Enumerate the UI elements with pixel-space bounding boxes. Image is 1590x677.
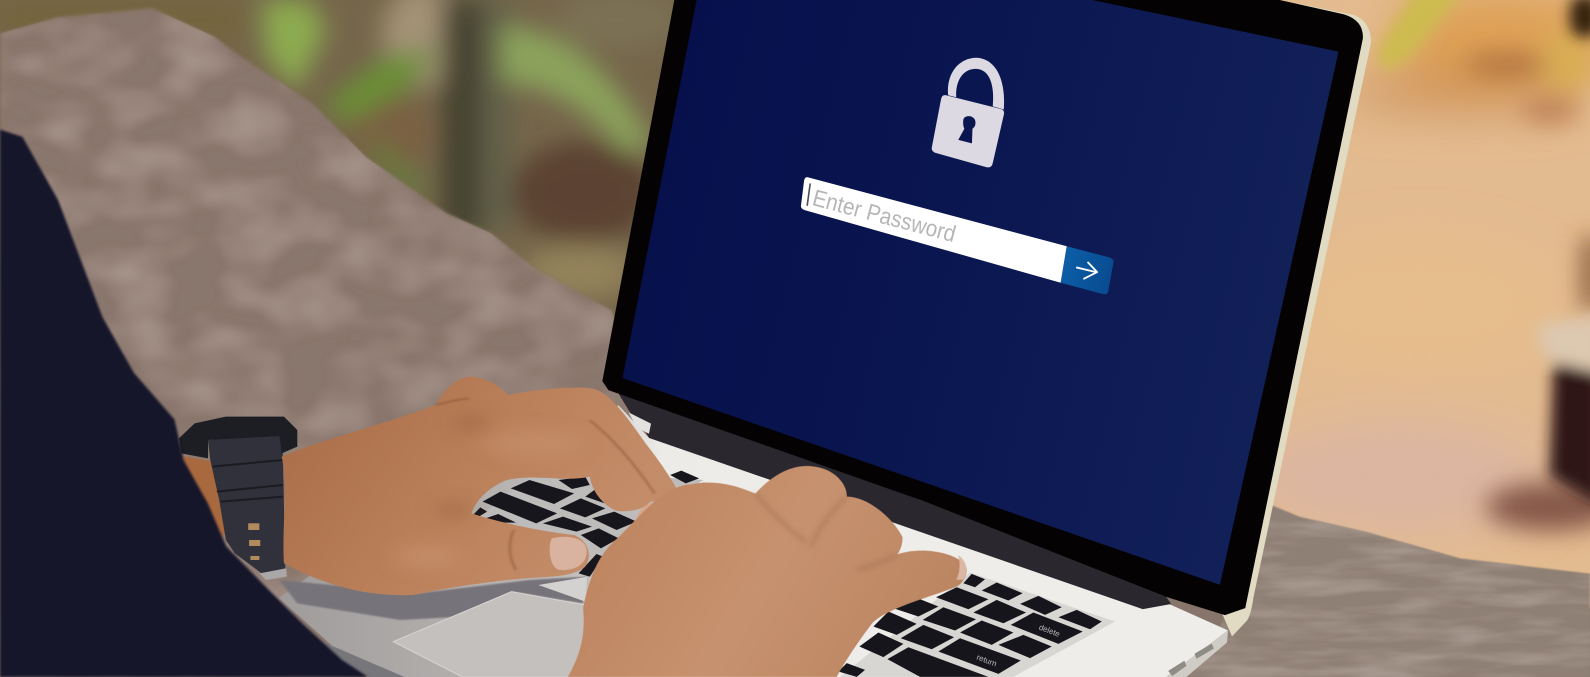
dark shirt sleeve xyxy=(0,130,368,677)
keyboard section between the hands xyxy=(471,471,713,577)
background: blurred foliage behind the table xyxy=(0,0,791,345)
lid black bezel xyxy=(602,0,1363,615)
laptop deck xyxy=(279,405,1228,677)
keyboard right section: delete xyxy=(1038,623,1062,639)
laptop xyxy=(279,0,1371,677)
trackpad and hand shadow xyxy=(279,577,588,677)
stone table surface at left xyxy=(0,8,649,677)
thumbnail xyxy=(550,537,587,570)
background: warm blurred ground at right xyxy=(1247,0,1590,608)
white deck corner near hinge xyxy=(629,412,651,434)
fingernail xyxy=(956,555,966,580)
strap keeper xyxy=(259,568,287,580)
finger and knuckle creases xyxy=(436,398,654,570)
left hand xyxy=(282,377,679,595)
hand shading xyxy=(396,416,583,568)
strap holes xyxy=(248,523,260,560)
lid silver rim xyxy=(1222,0,1371,636)
fingertip xyxy=(637,502,666,523)
text cursor xyxy=(807,183,810,206)
front edge with ports xyxy=(1166,630,1228,677)
icon: padlock xyxy=(932,58,1004,167)
keyboard right section: return xyxy=(975,653,998,669)
submit button with arrow xyxy=(1061,246,1113,294)
finger creases xyxy=(755,494,897,570)
watch case xyxy=(179,417,297,458)
right hand xyxy=(568,466,967,677)
forearm xyxy=(183,456,226,537)
watch strap xyxy=(208,435,285,573)
wristwatch xyxy=(179,417,297,580)
screen xyxy=(623,0,1339,585)
stone table surface at right xyxy=(1166,505,1590,677)
keyboard right section xyxy=(838,573,1115,677)
keyhole xyxy=(958,116,975,143)
placeholder text: Enter Password xyxy=(810,184,959,247)
password input field xyxy=(801,177,1067,283)
hinge band xyxy=(608,377,1171,609)
